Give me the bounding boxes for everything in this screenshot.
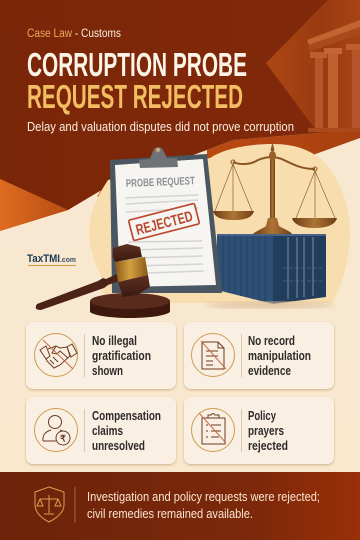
card text: prayers [248, 424, 284, 438]
card text: Compensation [92, 409, 161, 423]
card text: No record [248, 334, 295, 348]
document heading: PROBE REQUEST [126, 175, 195, 190]
card text: evidence [248, 364, 291, 378]
card: compensation claims [26, 397, 176, 464]
footer text: civil remedies remained available. [87, 507, 253, 521]
card text: claims [92, 424, 123, 438]
logo [27, 253, 76, 266]
card text: rejected [248, 439, 288, 453]
arrow panel with courthouse [266, 0, 360, 133]
clip [139, 147, 178, 168]
icon: document crossed [192, 334, 234, 376]
gavel [36, 244, 170, 318]
dotted texture [5, 7, 47, 25]
subtitle: Delay and valuation disputes did not prove corruption [27, 119, 294, 134]
stamp: rejected: REJECTED [134, 208, 195, 239]
card text: unresolved [92, 439, 145, 453]
footer text: Investigation and policy requests were rejected; [87, 490, 320, 504]
logo: TaxTMI [27, 253, 60, 265]
card text [92, 409, 161, 453]
clipboard [110, 147, 222, 293]
footer [0, 472, 360, 540]
container [217, 234, 326, 304]
icon: checklist crossed [192, 408, 234, 452]
icon: handshake crossed [34, 334, 78, 376]
document lines [125, 195, 204, 273]
card text: manipulation [248, 349, 311, 363]
logo: .com [60, 255, 76, 264]
card text: No illegal [92, 334, 137, 348]
scales [213, 142, 337, 234]
base shadow [205, 302, 335, 308]
icon: person with rupee: ₹ [60, 434, 66, 444]
card text: shown [92, 364, 123, 378]
icon: shield with scales [35, 487, 64, 522]
card: no illegal gratification [26, 322, 176, 389]
title [27, 47, 247, 115]
card: policy prayers [184, 397, 334, 464]
eyebrow: Case Law - Customs [27, 28, 121, 40]
card text [92, 334, 151, 378]
card text [248, 409, 288, 453]
icon: person with rupee [34, 408, 78, 452]
peach disc [89, 144, 350, 303]
paper [115, 159, 216, 287]
footer text [87, 490, 320, 521]
card text [248, 334, 311, 378]
card text: gratification [92, 349, 151, 363]
card: no record manipulation [184, 322, 334, 389]
card text: Policy [248, 409, 276, 423]
